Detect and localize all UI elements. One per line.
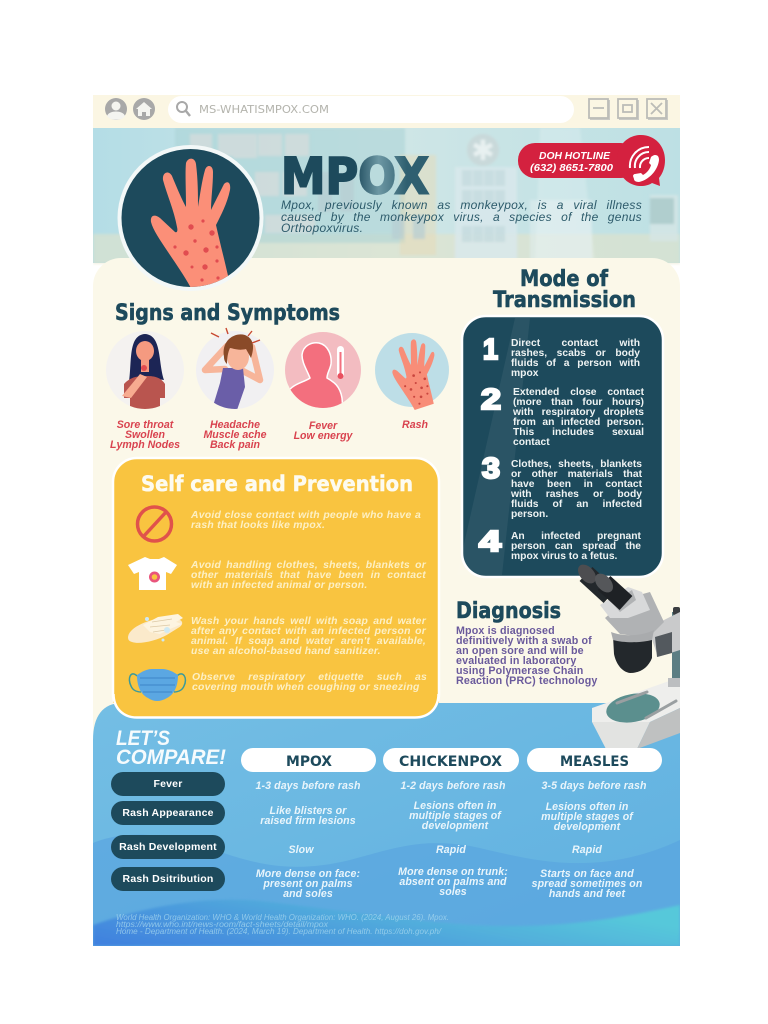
transmission text 4: mpox virus to a fetus.	[511, 551, 617, 562]
chickenpox column: 1-2 days before rash	[400, 780, 506, 792]
heading: mode of transmission: Transmission	[493, 288, 636, 313]
mpox column: Like blisters or	[270, 805, 346, 817]
hero background: blurred hospital: ✱	[471, 134, 495, 167]
chickenpox column: More dense on trunk:	[398, 866, 508, 878]
transmission text 3	[511, 459, 642, 520]
transmission text 2: Extended close contact	[513, 387, 644, 398]
prevention text 2: with an infected animal or person.	[191, 580, 368, 591]
transmission text 2: with respiratory droplets	[513, 407, 644, 418]
transmission text 1	[511, 338, 640, 379]
search bar: MS-WHATISMPOX.COM	[199, 103, 329, 116]
mpox column	[255, 780, 361, 900]
transmission text 3: Clothes, sheets, blankets	[511, 459, 642, 470]
numbers: 4	[479, 526, 501, 558]
transmission text 1: Direct contact with	[511, 338, 640, 349]
icon: washing hands	[128, 614, 183, 643]
symptom label 3: Fever	[309, 420, 337, 432]
prevention text 2: Avoid handling clothes, sheets, blankets or	[191, 560, 426, 571]
window buttons	[589, 99, 668, 120]
icon: headache	[196, 328, 274, 410]
icon: fever	[285, 332, 361, 410]
measles column: Starts on face and	[540, 868, 634, 880]
column headers: MEASLES	[560, 754, 629, 770]
hotline badge	[518, 135, 665, 186]
row label: rash development: Rash Development	[119, 841, 217, 853]
measles column: Lesions often in	[546, 801, 628, 813]
measles column: multiple stages of	[541, 811, 633, 823]
transmission text 3: person.	[511, 509, 548, 520]
measles column: hands and feet	[549, 888, 625, 900]
transmission text 2: (more than four hours)	[513, 397, 644, 408]
cream content panel	[93, 258, 680, 758]
icon: phone	[630, 147, 659, 182]
prevention text 3: animal. If soap and water aren't available,	[191, 636, 426, 647]
symptom label 2: Headache	[210, 419, 260, 431]
panel: transmission	[457, 316, 663, 577]
symptom label 1: Lymph Nodes	[110, 439, 180, 451]
intro text: Mpox, previously known as monkeypox, is a viral illness	[281, 198, 642, 212]
symptom label 1: Sore throat	[117, 419, 173, 431]
chickenpox column: absent on palms and	[399, 876, 507, 888]
panel: self care and prevention: Self care and Prevention	[141, 472, 413, 496]
transmission text 1: mpox	[511, 368, 538, 379]
citations: https://www.who.int/news-room/fact-sheets/detail/mpox	[116, 920, 329, 929]
prevention text 1: Avoid close contact with people who have a	[191, 510, 421, 521]
intro text	[281, 198, 642, 235]
measles column: Rapid	[572, 844, 602, 856]
transmission text 4: person can spread the	[511, 541, 641, 552]
symptom label 3: Low energy	[294, 430, 352, 442]
heading: mode of transmission: Mode of	[520, 267, 608, 292]
transmission text 4: An infected pregnant	[511, 531, 641, 542]
transmission text 3: with rashes or body	[511, 489, 642, 500]
prevention text 2	[190, 560, 426, 591]
symptom label 2: Back pain	[210, 439, 260, 451]
row label: fever: Fever	[153, 778, 183, 790]
diagnosis text	[456, 625, 598, 687]
prevention text 4: covering mouth when coughing or sneezing	[192, 682, 420, 693]
chickenpox column: Rapid	[436, 844, 466, 856]
citations	[116, 913, 449, 936]
intro text: Orthopoxvirus.	[281, 221, 363, 235]
prevention text 1: rash that looks like mpox.	[191, 520, 325, 531]
mpox column: raised firm lesions	[260, 815, 356, 827]
transmission text 2: This includes sexual	[513, 427, 644, 438]
diagnosis text: Reaction (PRC) technology	[456, 675, 598, 687]
column headers	[241, 748, 662, 772]
prevention text 1	[190, 510, 421, 531]
let's compare heading	[116, 730, 226, 764]
title: MPOX	[281, 148, 429, 206]
mpox column: Slow	[288, 844, 314, 856]
transmission text 1: rashes, scabs or body	[511, 348, 640, 359]
icon: sore throat	[122, 334, 165, 409]
transmission text 3: fluids of an infected	[511, 499, 642, 510]
symptom label 1: Swollen	[125, 429, 165, 441]
chickenpox column	[398, 780, 508, 898]
mpox column: 1-3 days before rash	[255, 780, 361, 792]
browser top bar	[93, 95, 680, 128]
transmission text 2	[513, 387, 644, 448]
row labels	[111, 772, 225, 891]
mpox column: present on palms	[263, 878, 353, 890]
symptom label 2: Muscle ache	[203, 429, 266, 441]
heading: signs and symptoms: Signs and Symptoms	[115, 301, 340, 326]
hero icon: hand with rash	[118, 145, 264, 292]
measles column	[532, 780, 647, 900]
yellow panel overlap	[113, 701, 439, 716]
panel: self care and prevention	[113, 458, 439, 718]
diagnosis text: evaluated in laboratory	[456, 655, 576, 667]
column headers: CHICKENPOX	[399, 754, 502, 770]
panel: compare background	[93, 703, 680, 946]
column headers: MPOX	[286, 754, 332, 770]
transmission text 3: or other materials that	[511, 469, 642, 480]
numbers: 3	[482, 453, 500, 485]
transmission text 2: from an infected person.	[513, 417, 644, 428]
citations: Home - Department of Health. (2024, March 19). Department of Health. https://doh.gov.ph/	[116, 927, 442, 936]
symptom label 3	[294, 420, 353, 442]
prevention text 3: after any contact with an infected person or	[191, 626, 426, 637]
icon: microscope	[574, 561, 680, 749]
chickenpox column: development	[422, 820, 488, 832]
diagnosis text: using Polymerase Chain	[456, 665, 583, 677]
icon: shirt	[128, 557, 177, 590]
search bar	[168, 96, 574, 123]
row label: rash distribution: Rash Dsitribution	[123, 873, 213, 885]
let's compare heading: LET’S	[116, 727, 170, 750]
icon: mask	[129, 669, 185, 701]
prevention text 3: Wash your hands well with soap and water	[191, 616, 426, 627]
hotline badge: (632) 8651-7800	[530, 162, 613, 174]
let's compare heading: COMPARE!	[116, 746, 226, 769]
transmission text 1: fluids of a person with	[511, 358, 640, 369]
icon: user	[105, 98, 127, 120]
mpox column: More dense on face:	[256, 868, 360, 880]
chickenpox column: Lesions often in	[414, 800, 496, 812]
diagnosis text: an open sore and will be	[456, 645, 584, 657]
chickenpox column: soles	[439, 886, 467, 898]
symptom label 1	[110, 419, 180, 451]
mpox column: and soles	[283, 888, 333, 900]
numbers: 1	[483, 334, 498, 366]
hotline badge: DOH HOTLINE	[539, 150, 611, 162]
prevention text 3: use an alcohol-based hand sanitizer.	[191, 646, 381, 657]
diagnosis text: definitively with a swab of	[456, 635, 592, 647]
chickenpox column: multiple stages of	[409, 810, 501, 822]
symptom label 4: Rash	[402, 419, 428, 431]
numbers	[479, 334, 501, 558]
numbers: 2	[481, 384, 501, 416]
icon: prohibited	[138, 507, 172, 541]
hero background: blurred hospital	[93, 128, 680, 264]
icon: rash	[375, 333, 449, 410]
measles column: 3-5 days before rash	[541, 780, 647, 792]
measles column: spread sometimes on	[532, 878, 642, 890]
heading: mode of transmission	[492, 268, 635, 308]
diagnosis text: Mpox is diagnosed	[456, 625, 555, 637]
heading: diagnosis: Diagnosis	[456, 598, 561, 624]
row label: rash appearance: Rash Appearance	[122, 807, 214, 819]
transmission text 3: have been in contact	[511, 479, 642, 490]
transmission text 4	[511, 531, 641, 562]
transmission text 2: contact	[513, 437, 550, 448]
intro text: caused by the monkeypox virus, a species of the genus	[281, 210, 642, 224]
prevention text 4	[192, 672, 427, 693]
citations: World Health Organization: WHO & World Health Organization: WHO. (2024, August 26). Mpox.	[116, 913, 449, 922]
prevention text 2: other materials that have been in contact	[191, 570, 426, 581]
prevention text 4: Observe respiratory etiquette such as	[192, 672, 427, 683]
prevention text 3	[191, 616, 426, 657]
measles column: development	[554, 821, 620, 833]
symptom label 2	[203, 419, 266, 451]
icon: home	[133, 98, 155, 120]
